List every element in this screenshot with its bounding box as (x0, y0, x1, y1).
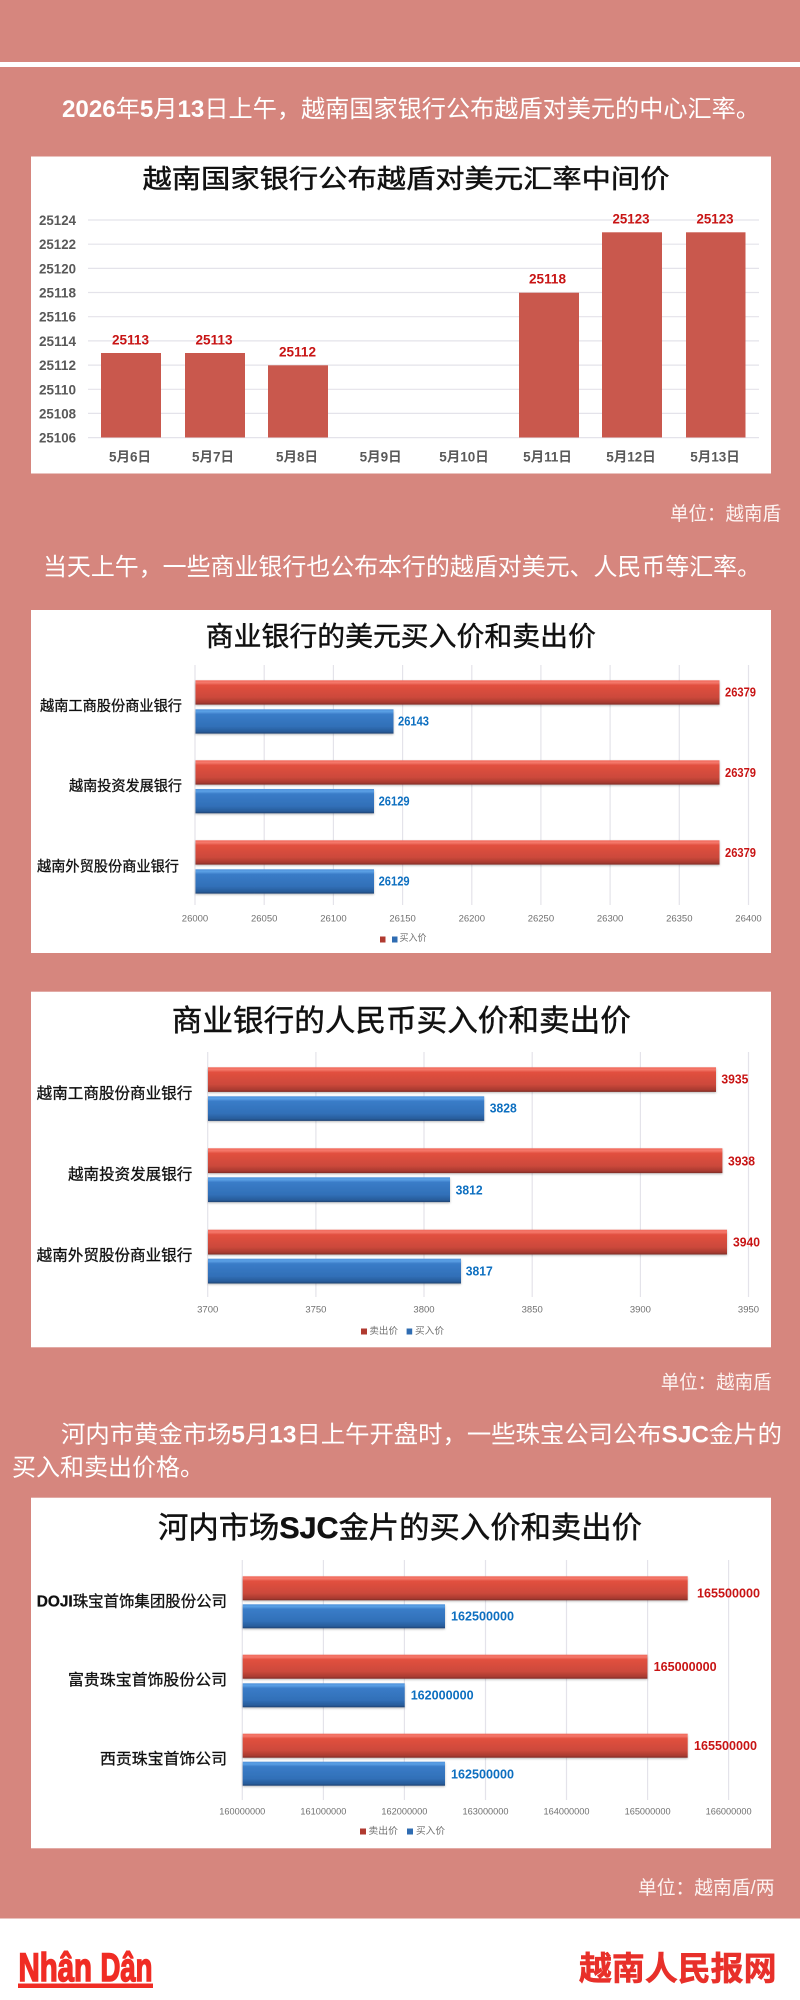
gridlines and y axis: 25124 (39, 213, 76, 228)
unit note 2: 单位：越南盾 (661, 1371, 772, 1393)
jewellery company category labels (37, 1593, 227, 1768)
bank category labels: 越南工商股份商业银行 (37, 1084, 192, 1102)
bar value labels: 3812 (456, 1183, 483, 1198)
column value labels: 25113 (196, 331, 233, 347)
chart title: 河内市场SJC金片的买入价和卖出价 (158, 1512, 642, 1545)
vertical gridlines and axis labels: 164000000 (544, 1807, 590, 1818)
columns (101, 232, 746, 438)
x axis date labels: 5月10日 (439, 450, 489, 465)
bar value labels: 26379 (725, 765, 756, 780)
legend: 卖出价 (369, 1325, 398, 1337)
x axis date labels: 5月7日 (192, 450, 234, 465)
bar value labels: 165500000 (694, 1738, 757, 1753)
vertical gridlines and axis labels: 3900 (630, 1305, 651, 1316)
legend: 买入价 (416, 1826, 445, 1837)
gridlines and y axis: 25116 (39, 310, 76, 325)
bar value labels: 26129 (379, 794, 410, 809)
bank category labels: 越南投资发展银行 (68, 1165, 192, 1183)
vertical gridlines and axis labels: 26200 (459, 913, 485, 924)
site name: 越南人民报网 (579, 1950, 776, 1987)
column value labels: 25123 (612, 210, 650, 226)
panel: central rate column chart (31, 156, 771, 474)
legend: 买入价 (415, 1326, 444, 1337)
vertical gridlines and axis labels: 166000000 (706, 1807, 752, 1818)
column value labels: 25123 (696, 210, 734, 226)
vertical gridlines and axis labels: 26100 (320, 913, 347, 924)
gridlines and y axis (39, 213, 759, 446)
bar value labels (379, 685, 756, 889)
intro text: gold market: 买入和卖出价格。 (12, 1455, 204, 1482)
vertical gridlines and axis labels: 26400 (735, 913, 762, 924)
legend (361, 1325, 444, 1337)
panel: RMB buy and sell bar chart (31, 992, 771, 1347)
bar value labels: 26129 (379, 874, 410, 889)
vertical gridlines and axis labels: 26150 (389, 913, 416, 924)
x axis date labels: 5月13日 (690, 450, 740, 465)
bar value labels: 3935 (721, 1071, 748, 1086)
vertical gridlines and axis labels: 3700 (197, 1305, 218, 1316)
column value labels: 25118 (529, 271, 566, 287)
panel: USD buy and sell bar chart (31, 610, 771, 953)
gridlines and y axis: 25122 (39, 237, 76, 252)
bank category labels (37, 698, 182, 875)
x axis date labels: 5月6日 (109, 450, 151, 465)
vertical gridlines and axis labels: 3750 (305, 1305, 326, 1316)
jewellery company category labels: 西贡珠宝首饰公司 (100, 1750, 227, 1768)
bank category labels (37, 1084, 192, 1265)
x axis date labels: 5月12日 (606, 450, 656, 465)
bars (208, 1067, 727, 1284)
bar value labels: 3828 (490, 1101, 517, 1116)
bar value labels: 165000000 (654, 1659, 717, 1674)
panel: SJC gold buy and sell bar chart (31, 1498, 771, 1848)
bar value labels: 26379 (725, 685, 756, 700)
vertical gridlines and axis labels: 26350 (666, 913, 693, 924)
gridlines and y axis: 25120 (39, 261, 76, 276)
vertical gridlines and axis labels (219, 1560, 752, 1818)
bars (243, 1576, 688, 1786)
legend: 买入价 (400, 933, 427, 944)
bar value labels: 3940 (733, 1235, 760, 1250)
vertical gridlines and axis labels: 26250 (528, 913, 554, 924)
logo: Nhan Dan wordmark: Nhân (18, 1946, 92, 1990)
logo: Nhan Dan wordmark: Dân (100, 1946, 152, 1990)
vertical gridlines and axis labels: 3850 (522, 1305, 543, 1316)
vertical gridlines and axis labels: 26050 (251, 913, 277, 924)
gridlines and y axis: 25112 (39, 358, 76, 373)
vertical gridlines and axis labels: 26000 (182, 913, 208, 924)
vertical gridlines and axis labels: 160000000 (219, 1807, 265, 1818)
x axis date labels: 5月11日 (523, 450, 572, 465)
intro text: gold market (12, 1422, 782, 1482)
column value labels: 25113 (112, 331, 149, 347)
bar value labels: 165500000 (697, 1586, 760, 1601)
gridlines and y axis: 25118 (39, 286, 76, 300)
vertical gridlines and axis labels: 165000000 (625, 1807, 671, 1818)
bar value labels: 26379 (725, 845, 756, 860)
vertical gridlines and axis labels: 163000000 (462, 1807, 508, 1818)
gridlines and y axis: 25108 (39, 406, 76, 421)
vertical gridlines and axis labels: 162000000 (381, 1807, 427, 1818)
bars (196, 680, 720, 894)
bar value labels: 162500000 (451, 1766, 514, 1781)
bar value labels (411, 1586, 760, 1781)
bar value labels: 162500000 (451, 1609, 514, 1624)
bar value labels (456, 1071, 760, 1279)
legend (380, 933, 427, 944)
white divider band (0, 62, 800, 67)
column value labels: 25112 (279, 343, 316, 359)
intro text: gold market: 河内市黄金市场5月13日上午开盘时，一些珠宝公司公布SJC金片的 (61, 1422, 782, 1449)
chart title: 商业银行的美元买入价和卖出价 (206, 622, 596, 652)
chart title: 商业银行的人民币买入价和卖出价 (172, 1005, 631, 1038)
bank category labels: 越南工商股份商业银行 (40, 698, 182, 715)
bar value labels: 3938 (728, 1153, 755, 1168)
gridlines and y axis: 25110 (39, 382, 76, 397)
bar value labels: 162000000 (411, 1687, 474, 1702)
bar value labels: 3817 (466, 1264, 493, 1279)
gridlines and y axis: 25106 (39, 431, 76, 446)
jewellery company category labels: DOJI珠宝首饰集团股份公司 (37, 1593, 227, 1611)
vertical gridlines and axis labels (197, 1052, 759, 1316)
vertical gridlines and axis labels: 3800 (413, 1305, 435, 1316)
x axis date labels: 5月8日 (276, 450, 318, 465)
vertical gridlines and axis labels: 26300 (597, 913, 623, 924)
chart title: 越南国家银行公布越盾对美元汇率中间价 (142, 164, 670, 194)
gridlines and y axis: 25114 (39, 334, 76, 349)
legend: 卖出价 (368, 1825, 399, 1837)
x axis date labels (109, 450, 740, 465)
bar value labels: 26143 (398, 714, 429, 729)
unit note 3: 单位：越南盾/两 (638, 1877, 774, 1899)
bank category labels: 越南外贸股份商业银行 (37, 1247, 192, 1265)
bank category labels: 越南外贸股份商业银行 (37, 858, 179, 875)
jewellery company category labels: 富贵珠宝首饰股份公司 (68, 1671, 227, 1689)
bank category labels: 越南投资发展银行 (69, 778, 182, 795)
vertical gridlines and axis labels: 3950 (738, 1305, 759, 1316)
column value labels (112, 210, 734, 359)
intro text: commercial banks: 当天上午，一些商业银行也公布本行的越盾对美元、人民币等汇率。 (43, 554, 761, 581)
legend (360, 1825, 445, 1837)
x axis date labels: 5月9日 (360, 450, 402, 465)
vertical gridlines and axis labels: 161000000 (300, 1807, 346, 1818)
unit note 1: 单位：越南盾 (670, 503, 781, 525)
vertical gridlines and axis labels (182, 665, 762, 924)
intro text: central rate: 2026年5月13日上午，越南国家银行公布越盾对美元的中心汇率。 (62, 96, 760, 123)
